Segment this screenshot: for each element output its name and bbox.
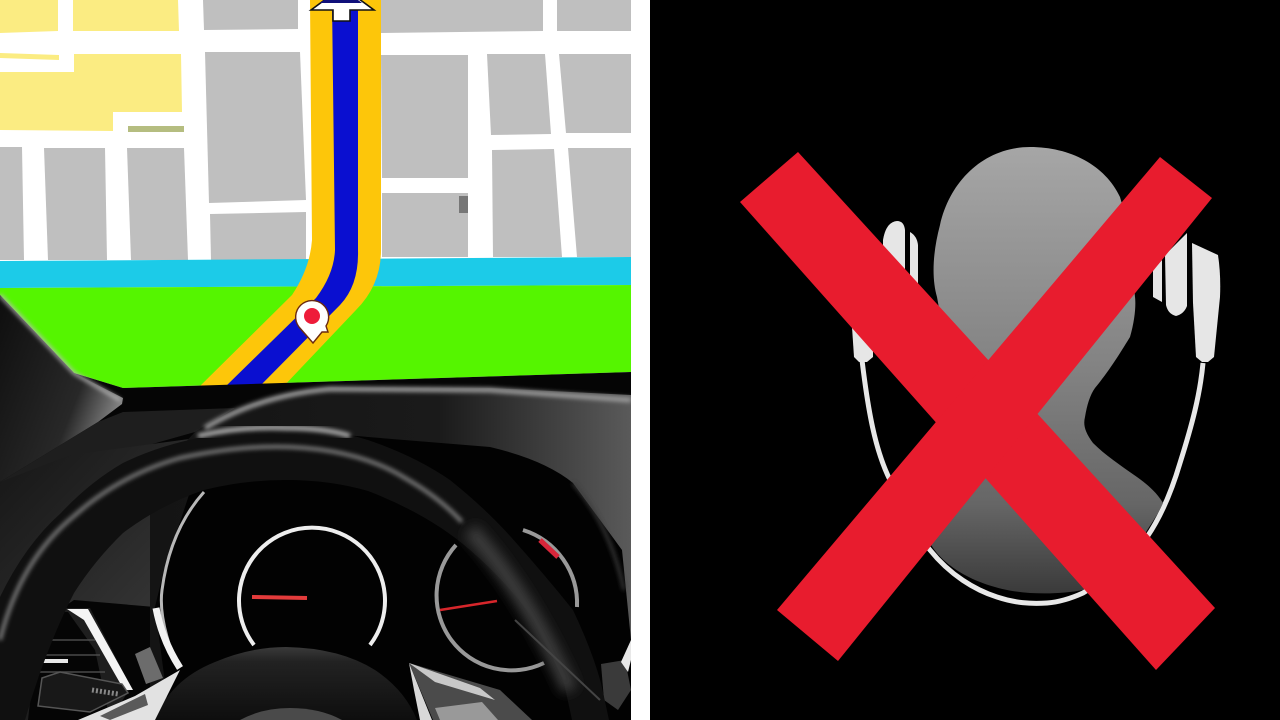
route: blue line <box>224 0 358 388</box>
map: green field <box>0 285 631 388</box>
dashboard: air vent <box>20 608 133 720</box>
icon: head silhouette <box>930 147 1163 593</box>
icon: red cross <box>740 152 1215 670</box>
map: dark building marker <box>459 196 468 213</box>
gauge: speedometer <box>239 528 385 645</box>
map: grey city blocks <box>0 0 631 260</box>
dashboard: control stalk <box>38 672 128 712</box>
map: yellow zones <box>0 0 182 131</box>
route: yellow outline <box>198 0 381 388</box>
gauge: tachometer <box>437 530 577 670</box>
icon: right earbud <box>1153 233 1220 362</box>
dashboard: right side stalk <box>601 640 631 710</box>
dashboard: A pillar <box>0 295 123 482</box>
dashboard: cowl top highlight <box>205 389 631 428</box>
steering wheel: left spoke <box>78 670 180 720</box>
steering wheel: highlights <box>0 428 600 700</box>
dashboard: binnacle silver trim <box>161 492 204 668</box>
panel edge: white divider <box>631 0 650 720</box>
dashboard: binnacle right rim highlight <box>573 483 624 590</box>
panel: crossed out headphones <box>740 147 1220 670</box>
steering wheel: right spoke buttons <box>409 663 532 720</box>
steering wheel: rim <box>0 428 609 720</box>
map: olive strip <box>128 126 184 132</box>
steering wheel: hub centre <box>240 708 342 720</box>
dashboard: lower left panel <box>0 437 204 650</box>
dashboard: base <box>0 295 631 720</box>
panel: navigation map through windshield <box>0 0 650 720</box>
icon: headphone cable <box>862 360 1203 603</box>
steering wheel: hub <box>155 647 417 720</box>
icon: left earbud <box>852 221 918 362</box>
dashboard: left upper dash <box>0 408 235 490</box>
dashboard: console button <box>135 647 163 684</box>
dashboard: upper cowl <box>150 387 631 720</box>
map: river <box>0 257 631 288</box>
dashboard: instrument binnacle <box>155 435 631 720</box>
icon: location pin <box>296 301 329 343</box>
icon: direction arrow <box>311 0 374 21</box>
